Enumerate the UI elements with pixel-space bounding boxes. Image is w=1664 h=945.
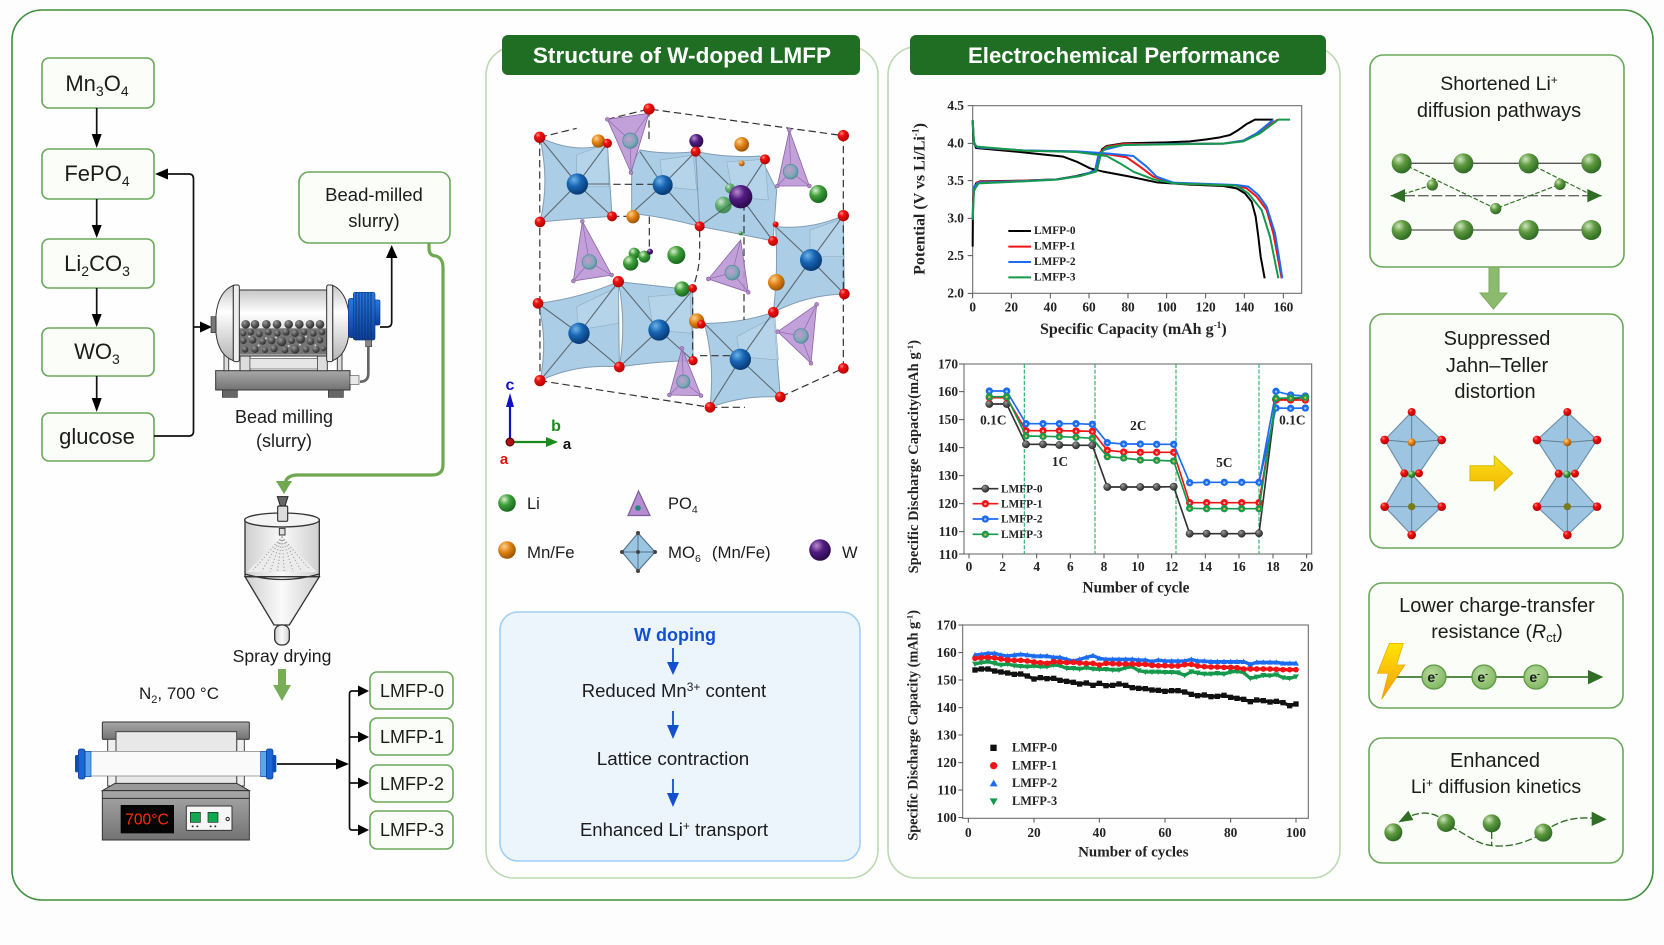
callout: W doping mechanism xyxy=(500,612,860,861)
chart: rate capability: 6 xyxy=(1067,559,1074,574)
heading: structure xyxy=(502,35,860,75)
heading: electrochemical performance xyxy=(910,35,1326,75)
chart: cycling stability: 130 xyxy=(937,727,957,742)
precursor box: FePO4: FePO xyxy=(64,161,122,186)
chart: cycling stability: 100 xyxy=(1286,825,1306,840)
precursor box: Li2CO3: 3 xyxy=(122,263,130,279)
chart: rate capability: 14 xyxy=(1199,559,1212,574)
chart: rate capability: 2 xyxy=(999,559,1006,574)
axis indicator: c xyxy=(506,377,515,394)
text: enhanced kinetics: + xyxy=(1426,776,1433,790)
arrow: slurry to spray dryer xyxy=(276,243,443,494)
precursor box: WO3: 3 xyxy=(112,351,120,367)
legend: atoms and polyhedra: Li xyxy=(527,495,540,513)
chart: cycling stability: 20 xyxy=(1027,825,1041,840)
chart: rate capability: 12 xyxy=(1165,559,1179,574)
text: lower Rct: resistance (R xyxy=(1431,621,1546,643)
chart: cycling stability: Number of cycles xyxy=(1078,844,1189,860)
arrow: glucose return loop and feed to mill xyxy=(154,168,212,436)
box: bead-milled slurry: slurry) xyxy=(348,210,400,231)
chart: voltage profile: 120 xyxy=(1196,300,1216,315)
chart: rate capability: 110 xyxy=(939,524,958,539)
chart: voltage profile: -1 xyxy=(912,128,922,136)
text: enhanced Li+ transport: Enhanced Li xyxy=(580,819,683,840)
chart: cycling stability: 100 xyxy=(937,810,957,825)
text: suppressed Jahn-Teller: Suppressed xyxy=(1444,328,1550,350)
panel: lower charge-transfer resistance xyxy=(1369,583,1623,708)
label: N2, 700 C: , 700 °C xyxy=(157,684,219,703)
panel: suppressed Jahn-Teller distortion xyxy=(1370,314,1623,548)
precursor box: Mn3O4: 3 xyxy=(96,83,104,99)
text: enhanced Li+ transport: transport xyxy=(690,819,768,840)
chart: voltage profile: 60 xyxy=(1082,300,1096,315)
precursor box: WO3 xyxy=(42,328,154,376)
text: enhanced kinetics: Enhanced xyxy=(1450,750,1540,772)
chart: cycling stability: -1 xyxy=(904,615,914,622)
arrow: FePO4 to Li2CO3 xyxy=(92,199,102,238)
legend: atoms and polyhedra: PO xyxy=(668,495,692,513)
chart: rate capability: 170 xyxy=(938,356,958,371)
chart: rate capability: 130 xyxy=(938,468,958,483)
precursor box: Li2CO3: 2 xyxy=(81,263,89,279)
diagram: octahedra before and after xyxy=(1380,408,1601,539)
precursor box: Mn3O4: Mn xyxy=(65,71,96,96)
chart: voltage profile: 0 xyxy=(969,300,976,315)
label: bead milling: (slurry) xyxy=(256,431,312,451)
chart: rate capability: 8 xyxy=(1101,559,1108,574)
legend: atoms and polyhedra: Mn/Fe xyxy=(527,543,575,562)
arrow: Mn3O4 to FePO4 xyxy=(92,108,102,148)
text: reduced Mn3+ content: Reduced Mn xyxy=(582,680,687,701)
chart: voltage profile: ) xyxy=(912,123,929,128)
chart: voltage profile: 4.5 xyxy=(947,98,964,113)
text: suppressed Jahn-Teller xyxy=(1444,328,1550,403)
chart: cycling stability: 110 xyxy=(937,782,957,797)
precursor box: Mn3O4 xyxy=(42,58,154,108)
box: bead-milled slurry: Bead-milled xyxy=(325,184,423,205)
arrow: spray dryer to furnace xyxy=(273,669,291,701)
text: lower Rct: ct xyxy=(1546,630,1557,645)
label: N2, 700 C: 2 xyxy=(151,694,157,706)
panel: electrochemical performance xyxy=(888,35,1340,878)
chart: rate capability: 1C xyxy=(1052,454,1068,469)
arrow: pathways to Jahn-Teller xyxy=(1480,267,1507,309)
icon: bead mill xyxy=(211,285,380,397)
chart: rate capability: 160 xyxy=(938,384,958,399)
legend: atoms and polyhedra: 4 xyxy=(692,504,698,516)
text: enhanced kinetics xyxy=(1411,750,1581,798)
panel: shortened Li+ diffusion pathways xyxy=(1370,55,1624,267)
diagram: electron transfer xyxy=(1377,643,1603,699)
chart: cycling stability: 80 xyxy=(1224,825,1238,840)
axis indicator: a xyxy=(563,436,572,453)
axis indicator: a xyxy=(500,451,509,468)
chart: rate capability: LMFP-0 xyxy=(1001,483,1043,495)
arrow: furnace output branching xyxy=(277,686,369,836)
chart: voltage profile: LMFP-3 xyxy=(1034,271,1076,283)
chart: voltage profile: ) xyxy=(1221,321,1227,338)
arrow: to reduced Mn3+ xyxy=(667,648,679,675)
heading: electrochemical performance: Electrochemical Performance xyxy=(968,43,1280,68)
chart: cycling stability: LMFP-1 xyxy=(1012,758,1057,772)
chart: rate capability: Specific Discharge Capacity(mAh g xyxy=(906,352,922,573)
text: shortened pathways xyxy=(1417,73,1581,122)
chart: rate capability: 20 xyxy=(1300,559,1314,574)
chart: voltage profile: -1 xyxy=(1214,321,1222,331)
text: lower Rct: Lower charge-transfer xyxy=(1399,595,1595,617)
arrow: yellow transition xyxy=(1470,456,1513,491)
chart: rate capability: LMFP-2 xyxy=(1001,514,1043,526)
chart: rate capability: 0.1C xyxy=(980,412,1006,427)
chart: voltage profile: LMFP-2 xyxy=(1034,256,1076,268)
icon: spray dryer xyxy=(245,497,319,645)
chart: rate capability: LMFP-1 xyxy=(1001,498,1043,510)
text: reduced Mn3+ content: 3+ xyxy=(687,680,700,694)
chart: cycling stability: 60 xyxy=(1158,825,1172,840)
precursor box: Mn3O4: O xyxy=(104,71,121,96)
chart: cycling stability: 160 xyxy=(937,645,957,660)
chart: rate capability: 110 xyxy=(939,547,958,562)
product box: LMFP-1: LMFP-1 xyxy=(380,727,444,747)
chart: voltage profile: 80 xyxy=(1121,300,1135,315)
panel: synthesis process xyxy=(42,58,453,849)
legend: atoms and polyhedra: 6 xyxy=(695,553,701,565)
precursor box: glucose xyxy=(42,413,154,461)
chart: rate capability: 5C xyxy=(1216,455,1232,470)
precursor box: WO3: WO xyxy=(74,339,112,364)
chart: cycling stability: LMFP-2 xyxy=(1012,776,1057,790)
precursor box: FePO4: 4 xyxy=(122,173,130,189)
axis indicator xyxy=(500,377,572,468)
axis indicator: b xyxy=(551,418,561,435)
chart: rate capability: 0 xyxy=(966,559,973,574)
icon: tube furnace xyxy=(75,722,276,840)
panel: structure of W-doped LMFP xyxy=(486,35,878,878)
label: bead milling xyxy=(235,407,333,451)
legend: atoms and polyhedra xyxy=(498,491,858,573)
icon: tube furnace: 700°C xyxy=(125,811,169,828)
product box: LMFP-0 xyxy=(370,672,453,709)
text: enhanced kinetics: Li xyxy=(1411,776,1426,798)
chart: rate capability: ) xyxy=(906,340,922,345)
chart: voltage profile: 2.0 xyxy=(947,286,964,301)
chart: cycling stability: Specific Discharge Capacity (mAh g xyxy=(905,622,921,841)
legend: atoms and polyhedra: (Mn/Fe) xyxy=(712,543,771,562)
text: shortened pathways: diffusion pathways xyxy=(1417,100,1581,122)
diagram: Li hopping path xyxy=(1384,811,1607,846)
precursor box: FePO4 xyxy=(42,149,154,199)
chart: voltage profile: 3.0 xyxy=(947,211,964,226)
chart: rate capability: 16 xyxy=(1232,559,1246,574)
chart: cycling stability: ) xyxy=(905,610,921,615)
product box: LMFP-3 xyxy=(370,811,453,849)
diagram: electron transfer: e xyxy=(1529,669,1537,685)
label: N2, 700 C: N xyxy=(139,684,151,703)
text: lower Rct xyxy=(1399,595,1595,645)
text: enhanced Li+ transport: + xyxy=(683,819,690,833)
text: shortened pathways: Shortened Li xyxy=(1440,73,1551,95)
chart: voltage profile: Specific Capacity (mAh g xyxy=(1040,321,1214,338)
precursor box: Mn3O4: 4 xyxy=(121,83,129,99)
arrow: to enhanced transport xyxy=(667,779,679,807)
text: reduced Mn3+ content: content xyxy=(700,680,766,701)
arrow: mill to slurry box xyxy=(380,245,397,327)
legend: atoms and polyhedra: MO xyxy=(668,543,695,562)
text: W doping: W doping xyxy=(634,625,716,645)
product box: LMFP-2: LMFP-2 xyxy=(380,774,444,794)
arrow: WO3 to glucose xyxy=(92,376,102,412)
text: suppressed Jahn-Teller: distortion xyxy=(1454,381,1536,403)
chart: rate capability: 4 xyxy=(1033,559,1040,574)
product box: LMFP-0: LMFP-0 xyxy=(380,681,444,701)
text: shortened pathways: + xyxy=(1551,73,1558,87)
chart: cycling stability xyxy=(904,610,1308,860)
chart: rate capability: -1 xyxy=(905,345,915,352)
chart: voltage profile xyxy=(912,98,1302,338)
chart: cycling stability: 120 xyxy=(937,755,957,770)
arrow: to lattice contraction xyxy=(667,711,679,739)
chart: cycling stability: 140 xyxy=(937,700,957,715)
chart: rate capability: Number of cycle xyxy=(1083,580,1190,597)
chart: rate capability: 10 xyxy=(1131,559,1145,574)
product box: LMFP-3: LMFP-3 xyxy=(380,820,444,840)
chart: voltage profile: Potential (V vs Li/Li xyxy=(912,136,929,275)
chart: voltage profile: 100 xyxy=(1157,300,1177,315)
chart: rate capability: 0.1C xyxy=(1279,412,1305,427)
diagram: electron transfer: - xyxy=(1485,669,1488,679)
panel: enhanced Li+ diffusion kinetics xyxy=(1369,738,1623,863)
diagram: electron transfer: e xyxy=(1427,669,1435,685)
diagram: electron transfer: e xyxy=(1477,669,1485,685)
product box: LMFP-2 xyxy=(370,765,453,802)
crystal structure diagram xyxy=(533,103,850,413)
precursor box: Li2CO3: CO xyxy=(89,251,122,276)
chart: rate capability: 140 xyxy=(938,440,958,455)
label: bead milling: Bead milling xyxy=(235,407,333,427)
chart: cycling stability: 170 xyxy=(937,617,957,632)
diagram: Li lattice rows xyxy=(1391,153,1602,240)
chart: voltage profile: LMFP-0 xyxy=(1034,225,1076,237)
box: bead-milled slurry xyxy=(299,172,450,243)
chart: cycling stability: 40 xyxy=(1093,825,1106,840)
text: lattice contraction: Lattice contraction xyxy=(597,748,749,769)
chart: voltage profile: LMFP-1 xyxy=(1034,241,1076,253)
chart: rate capability: 150 xyxy=(938,412,958,427)
precursor box: Li2CO3 xyxy=(42,239,154,288)
chart: cycling stability: LMFP-3 xyxy=(1012,794,1057,808)
precursor box: Li2CO3: Li xyxy=(64,251,81,276)
text: lower Rct: ) xyxy=(1556,621,1563,643)
product box: LMFP-1 xyxy=(370,718,453,755)
chart: voltage profile: 160 xyxy=(1273,300,1294,315)
chart: voltage profile: 4.0 xyxy=(947,135,964,150)
chart: voltage profile: 2.5 xyxy=(947,248,964,263)
precursor box: glucose: glucose xyxy=(59,424,135,449)
diagram: electron transfer: - xyxy=(1537,669,1540,679)
legend: atoms and polyhedra: W xyxy=(842,544,858,562)
chart: cycling stability: 0 xyxy=(965,825,972,840)
chart: rate capability: LMFP-3 xyxy=(1001,529,1043,541)
arrow: Li2CO3 to WO3 xyxy=(92,288,102,327)
chart: cycling stability: LMFP-0 xyxy=(1012,740,1057,754)
chart: rate capability: 2C xyxy=(1130,418,1146,433)
chart: voltage profile: 40 xyxy=(1044,300,1057,315)
chart: rate capability xyxy=(905,340,1314,597)
diagram: electron transfer: - xyxy=(1435,669,1438,679)
chart: voltage profile: 140 xyxy=(1234,300,1255,315)
chart: cycling stability: 150 xyxy=(937,672,957,687)
chart: voltage profile: 3.5 xyxy=(947,173,964,188)
label: spray drying: Spray drying xyxy=(233,646,331,666)
chart: rate capability: 18 xyxy=(1266,559,1280,574)
heading: structure: Structure of W-doped LMFP xyxy=(533,43,831,68)
chart: rate capability: 120 xyxy=(938,496,958,511)
chart: voltage profile: 20 xyxy=(1005,300,1018,315)
text: enhanced kinetics: diffusion kinetics xyxy=(1433,776,1581,798)
text: suppressed Jahn-Teller: Jahn–Teller xyxy=(1446,355,1548,377)
